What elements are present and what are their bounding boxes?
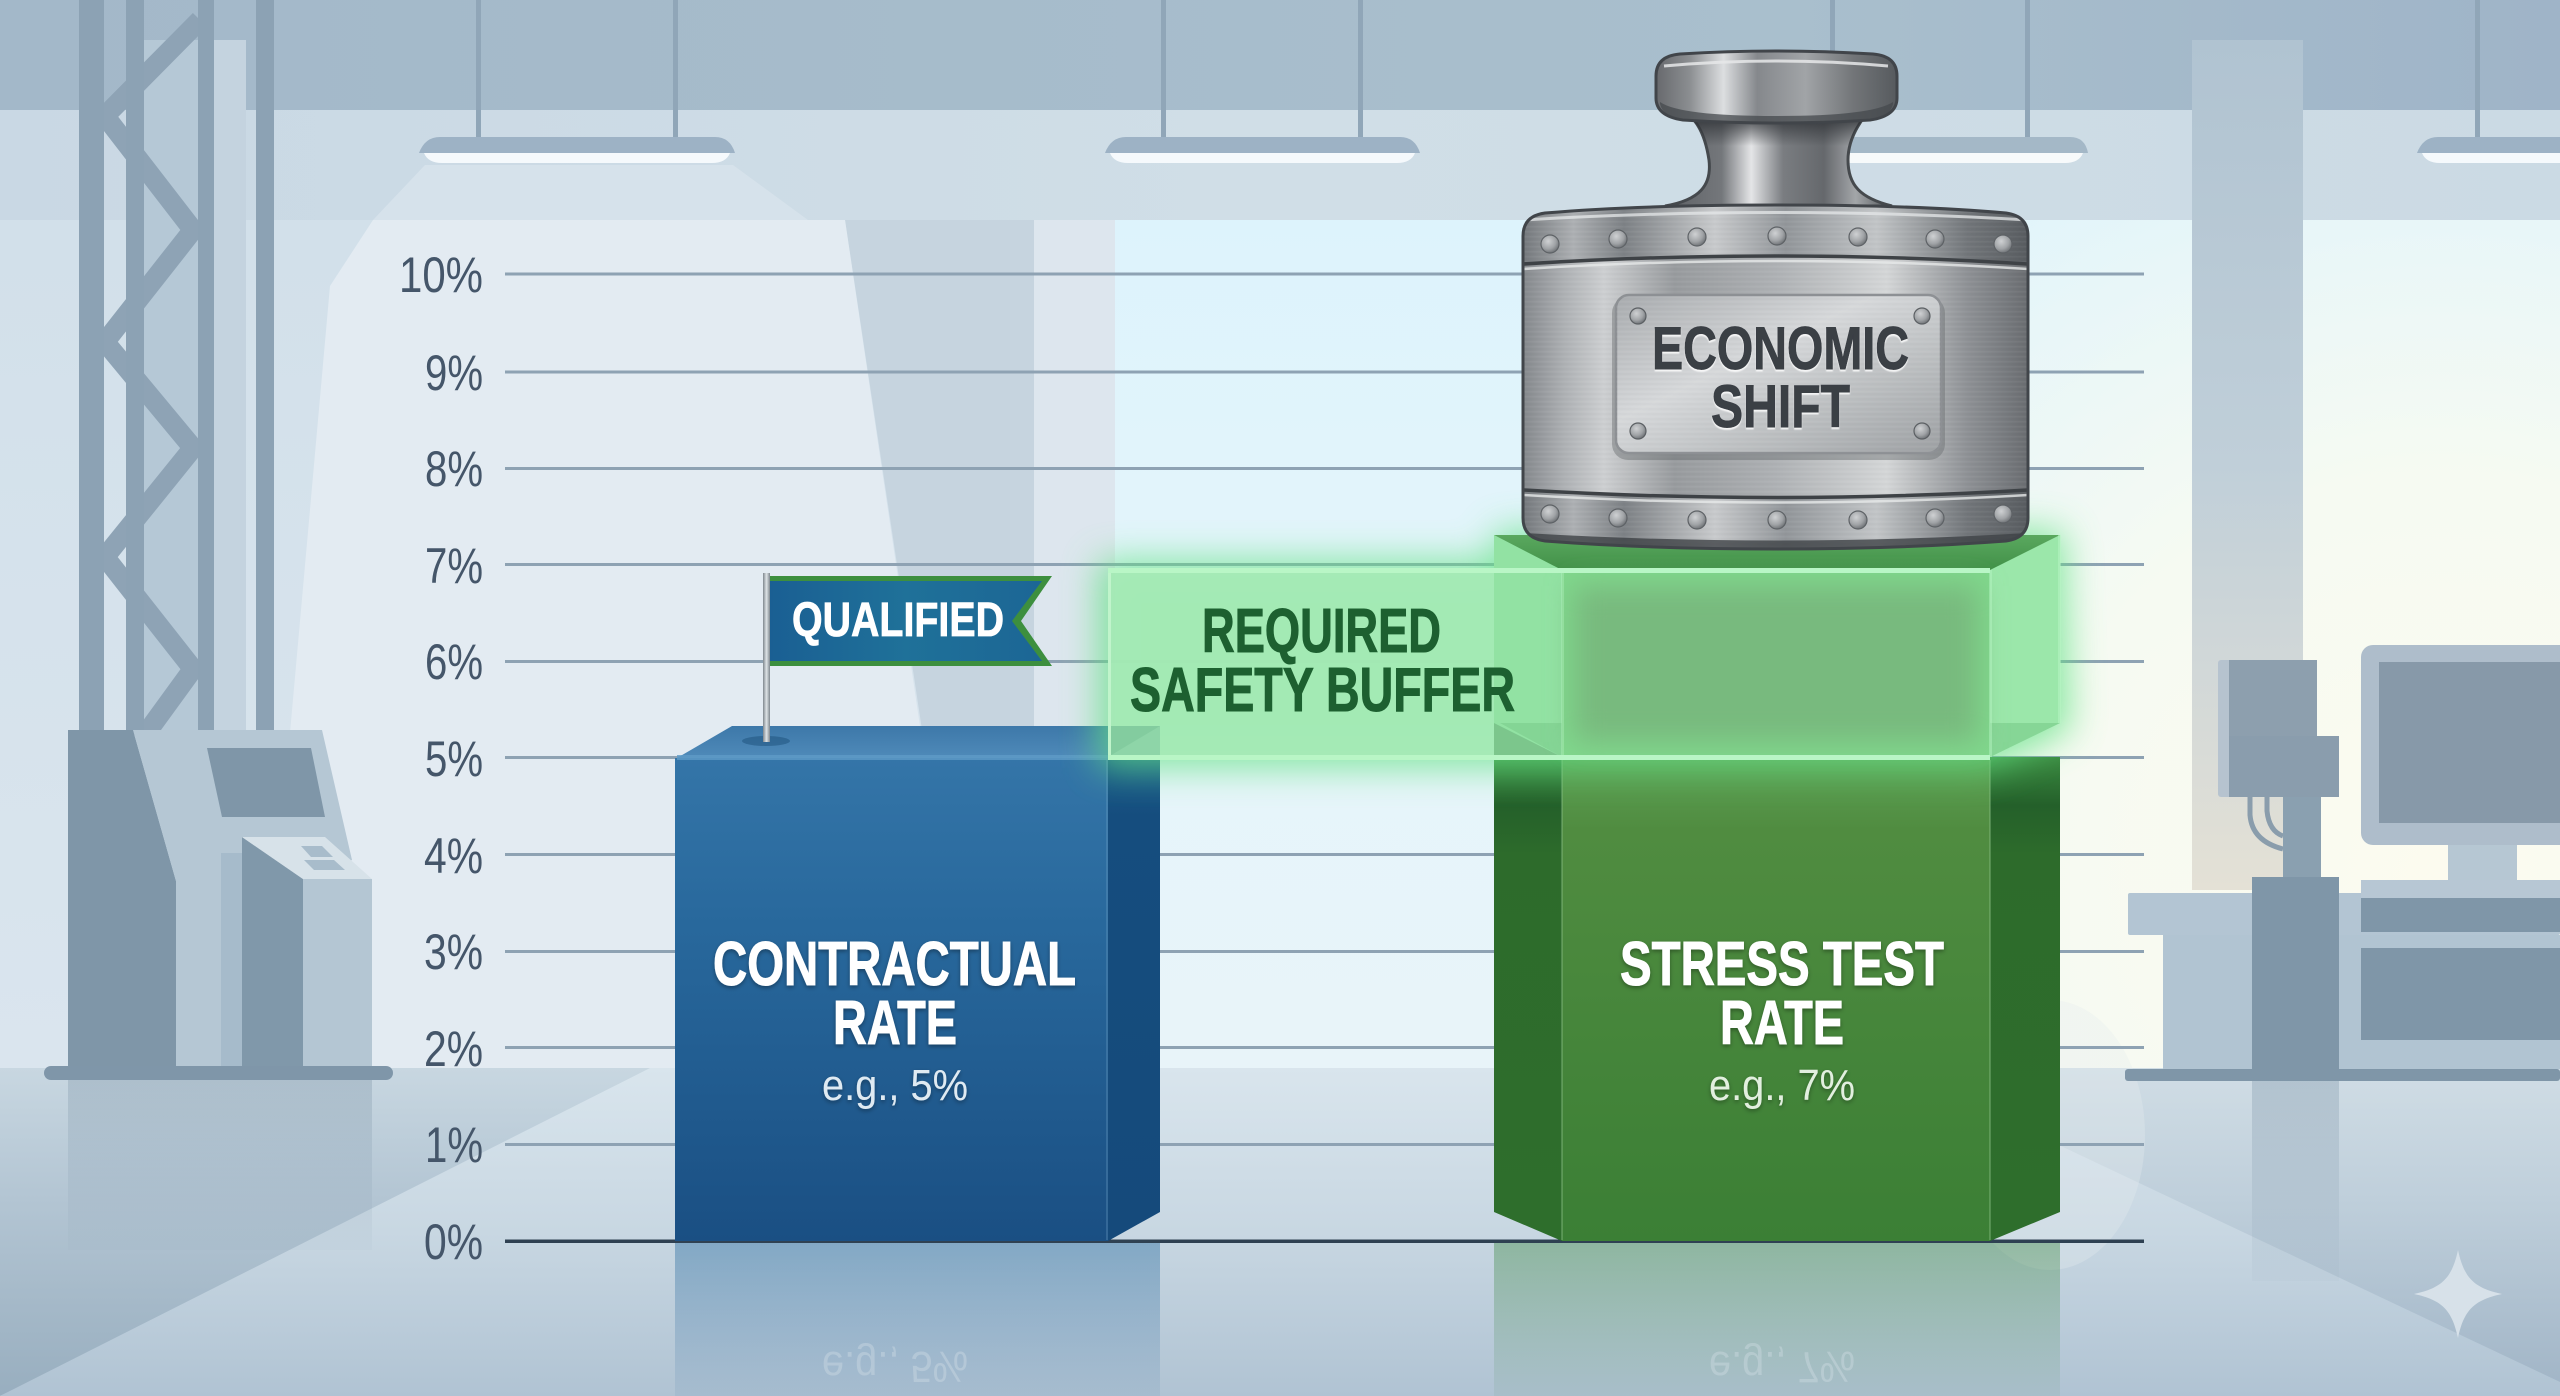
green bar label: STRESS TEST bbox=[1620, 930, 1944, 999]
y axis labels bbox=[399, 247, 483, 1270]
blue bar label: RATE bbox=[833, 989, 957, 1058]
y axis labels: 9% bbox=[425, 345, 483, 401]
y axis labels: 8% bbox=[425, 441, 483, 497]
green bar label: RATE bbox=[1720, 989, 1844, 1058]
y axis labels: 7% bbox=[425, 538, 483, 594]
kiosk screen bbox=[207, 748, 325, 817]
lamp 4 bbox=[2417, 0, 2560, 163]
buffer label: SAFETY BUFFER bbox=[1130, 656, 1515, 725]
nameplate: SHIFT bbox=[1711, 373, 1850, 440]
floor reflections of bars bbox=[675, 1241, 2060, 1396]
right pillar bbox=[2192, 40, 2303, 890]
reflected label 7: e.g., 7% bbox=[1709, 1342, 1855, 1391]
weight knob bbox=[1656, 51, 1897, 123]
y axis labels: 2% bbox=[424, 1021, 483, 1077]
machine column bbox=[2218, 660, 2339, 1069]
monitor bbox=[2361, 645, 2560, 880]
desk and monitor scene bbox=[2125, 645, 2560, 1281]
lamp 3 bbox=[1772, 0, 2088, 163]
weight body bbox=[1523, 205, 2028, 549]
chart gridlines bbox=[505, 272, 2144, 1243]
floor bbox=[0, 1000, 2560, 1396]
green bar label: e.g., 7% bbox=[1709, 1061, 1855, 1110]
required safety buffer glass block bbox=[1098, 530, 2070, 768]
y axis labels: 3% bbox=[424, 924, 483, 980]
glow bbox=[1098, 530, 2070, 768]
green bar: stress test rate bbox=[1494, 757, 2060, 1241]
shaded wall segment bbox=[845, 220, 1034, 730]
ceiling band upper bbox=[0, 0, 2560, 110]
y axis labels: 0% bbox=[424, 1214, 483, 1270]
blue bar label bbox=[713, 930, 1076, 1110]
lamp 2 bbox=[1105, 0, 1420, 163]
glass left side bbox=[1494, 535, 1562, 757]
blue bar: contractual rate bbox=[675, 726, 1160, 1241]
glass right side bbox=[1990, 535, 2060, 757]
buffer label: REQUIRED bbox=[1202, 597, 1441, 666]
light beam upper bbox=[373, 165, 808, 220]
blue bar label: CONTRACTUAL bbox=[713, 930, 1076, 999]
windows bbox=[1115, 220, 2560, 1070]
nameplate: ECONOMIC bbox=[1652, 315, 1909, 382]
ceiling lamps bbox=[419, 0, 2560, 163]
reflected label 5: e.g., 5% bbox=[822, 1342, 968, 1391]
y axis labels: 10% bbox=[399, 247, 483, 303]
lattice tower bbox=[79, 0, 274, 740]
y axis labels: 6% bbox=[425, 634, 483, 690]
buffer label bbox=[1130, 597, 1515, 725]
glass bright edges bbox=[1108, 535, 2061, 760]
light beam lower bbox=[260, 220, 925, 1068]
kiosk machine bbox=[44, 730, 393, 1250]
y axis labels: 1% bbox=[425, 1117, 483, 1173]
y axis labels: 4% bbox=[424, 828, 483, 884]
rivets bbox=[1541, 227, 2012, 529]
ceiling band lower bbox=[0, 110, 2560, 220]
buffer strip bbox=[1108, 570, 1494, 757]
weight neck bbox=[1665, 116, 1892, 206]
blue bar label: e.g., 5% bbox=[822, 1061, 968, 1110]
qualified flag bbox=[742, 573, 1052, 746]
green bar label bbox=[1620, 930, 1944, 1110]
wall left bbox=[0, 220, 1115, 1070]
qualified flag: QUALIFIED bbox=[792, 594, 1004, 647]
glass front bbox=[1562, 570, 1990, 757]
y axis labels: 5% bbox=[425, 731, 483, 787]
centre column bbox=[1034, 220, 1115, 1070]
nameplate bbox=[1612, 295, 1945, 460]
icon: sparkle star bbox=[2414, 1250, 2502, 1338]
economic shift weight bbox=[1523, 51, 2028, 549]
glass top bbox=[1494, 535, 2060, 570]
lamp 1 bbox=[419, 0, 735, 163]
